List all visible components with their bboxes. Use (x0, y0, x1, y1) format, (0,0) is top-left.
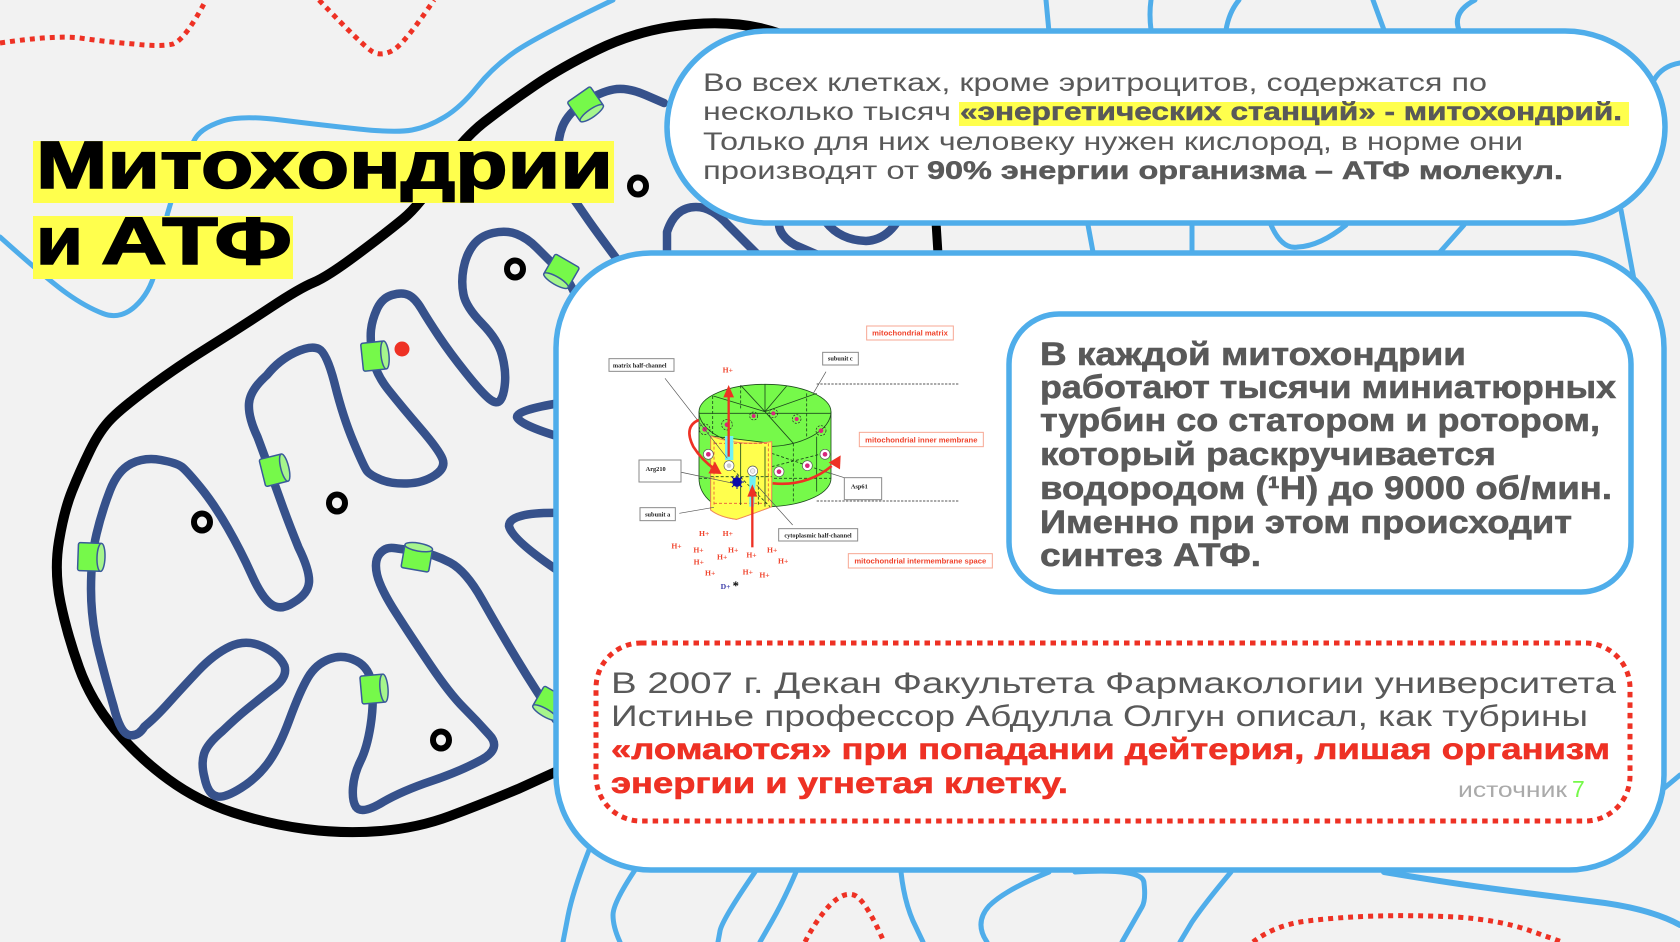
diagram: ATP synthase rotor: matrix half-channel (613, 362, 667, 369)
callout text (611, 667, 1616, 800)
diagram: ATP synthase rotor: subunit c (828, 356, 853, 363)
turbines text: который раскручивается (1040, 436, 1496, 472)
c-ring green cylinder (699, 384, 831, 507)
red arrows (689, 385, 841, 547)
turbines text: В каждой митохондрии (1040, 336, 1466, 372)
callout text: энергии и угнетая клетку. (611, 767, 1068, 800)
proton labels: H+ (778, 556, 788, 565)
proton labels: H+ (743, 567, 753, 576)
source note: источник (1458, 779, 1568, 802)
source note (1458, 776, 1585, 802)
mitochondrion illustration (57, 23, 938, 832)
source note: 7 (1572, 776, 1585, 802)
panel: main card (556, 253, 1664, 870)
diagram: ATP synthase rotor: D+ (721, 582, 731, 591)
proton labels: H+ (717, 552, 727, 561)
icons: matrix granules (194, 178, 646, 748)
panel: top intro (667, 31, 1665, 223)
proton labels: H+ (746, 551, 757, 560)
title: Митохондрии (36, 128, 613, 203)
proton labels: H+ (723, 529, 733, 538)
proton labels: H+ (767, 545, 777, 554)
turbines text: турбин со статором и ротором, (1040, 402, 1600, 438)
callout text: Истинье профессор Абдулла Олгун описал, как тубрины (611, 700, 1588, 733)
diagram: ATP synthase rotor: Asp61 (851, 483, 868, 490)
intro text: несколько тысяч (703, 98, 951, 126)
diagram: ATP synthase rotor: Arg210 (646, 466, 666, 473)
blue star (730, 475, 744, 489)
proton labels: H+ (699, 529, 709, 538)
intro text: производят от (703, 157, 920, 185)
diagram: ATP synthase rotor: mitochondrial inner membrane (865, 435, 977, 444)
proton labels: H+ (723, 365, 733, 374)
panel: turbines (1009, 314, 1631, 592)
panel: 2007 study callout (596, 643, 1630, 821)
highlight: energy stations (959, 102, 1629, 126)
icons: ATP synthase cylinders (78, 86, 605, 723)
subunit a yellow back (711, 431, 772, 519)
callout text: В 2007 г. Декан Факультета Фармакологии университета (611, 667, 1616, 700)
intro text: 90% энергии организма – АТФ молекул. (927, 157, 1563, 185)
membrane boundary dashes (817, 384, 958, 501)
proton labels: H+ (693, 545, 704, 554)
ring lines (699, 384, 831, 447)
callout text: «ломаются» при попадании дейтерия, лишая организм (611, 733, 1610, 766)
outer membrane (57, 23, 938, 832)
turbines text: водородом (¹H) до 9000 об/мин. (1040, 470, 1612, 506)
proton labels: H+ (728, 545, 738, 554)
proton labels: H+ (705, 568, 715, 577)
turbines text (1040, 336, 1616, 573)
diagram: ATP synthase rotor: subunit a (645, 511, 671, 518)
diagram: ATP synthase rotor (609, 326, 992, 593)
intro text: «энергетических станций» - митохондрий. (960, 98, 1622, 126)
yellow front (711, 436, 772, 519)
turbines text: работают тысячи миниатюрных (1040, 369, 1616, 405)
title: и (36, 204, 83, 279)
diagram: ATP synthase rotor: * (733, 579, 739, 593)
proton labels: H+ (694, 558, 704, 567)
proton labels (671, 365, 788, 580)
labels (867, 326, 953, 340)
leader lines (665, 372, 844, 525)
turbines text: Именно при этом происходит (1040, 504, 1572, 540)
inner membrane cristae (91, 89, 897, 810)
title (33, 128, 614, 279)
intro text: Во всех клетках, кроме эритроцитов, содержатся по (703, 69, 1487, 97)
intro text: Только для них человеку нужен кислород, в норме они (703, 128, 1523, 156)
intro text (703, 69, 1622, 185)
pink residues (699, 409, 830, 477)
turbines text: синтез АТФ. (1040, 537, 1261, 573)
diagram: ATP synthase rotor: mitochondrial intermembrane space (854, 557, 986, 566)
proton labels: H+ (759, 571, 770, 580)
proton labels: H+ (671, 542, 682, 551)
diagram: ATP synthase rotor: cytoplasmic half-channel (784, 532, 852, 539)
title: АТФ (101, 204, 292, 279)
diagram: ATP synthase rotor: mitochondrial matrix (872, 329, 949, 338)
cyan channels (725, 436, 756, 507)
